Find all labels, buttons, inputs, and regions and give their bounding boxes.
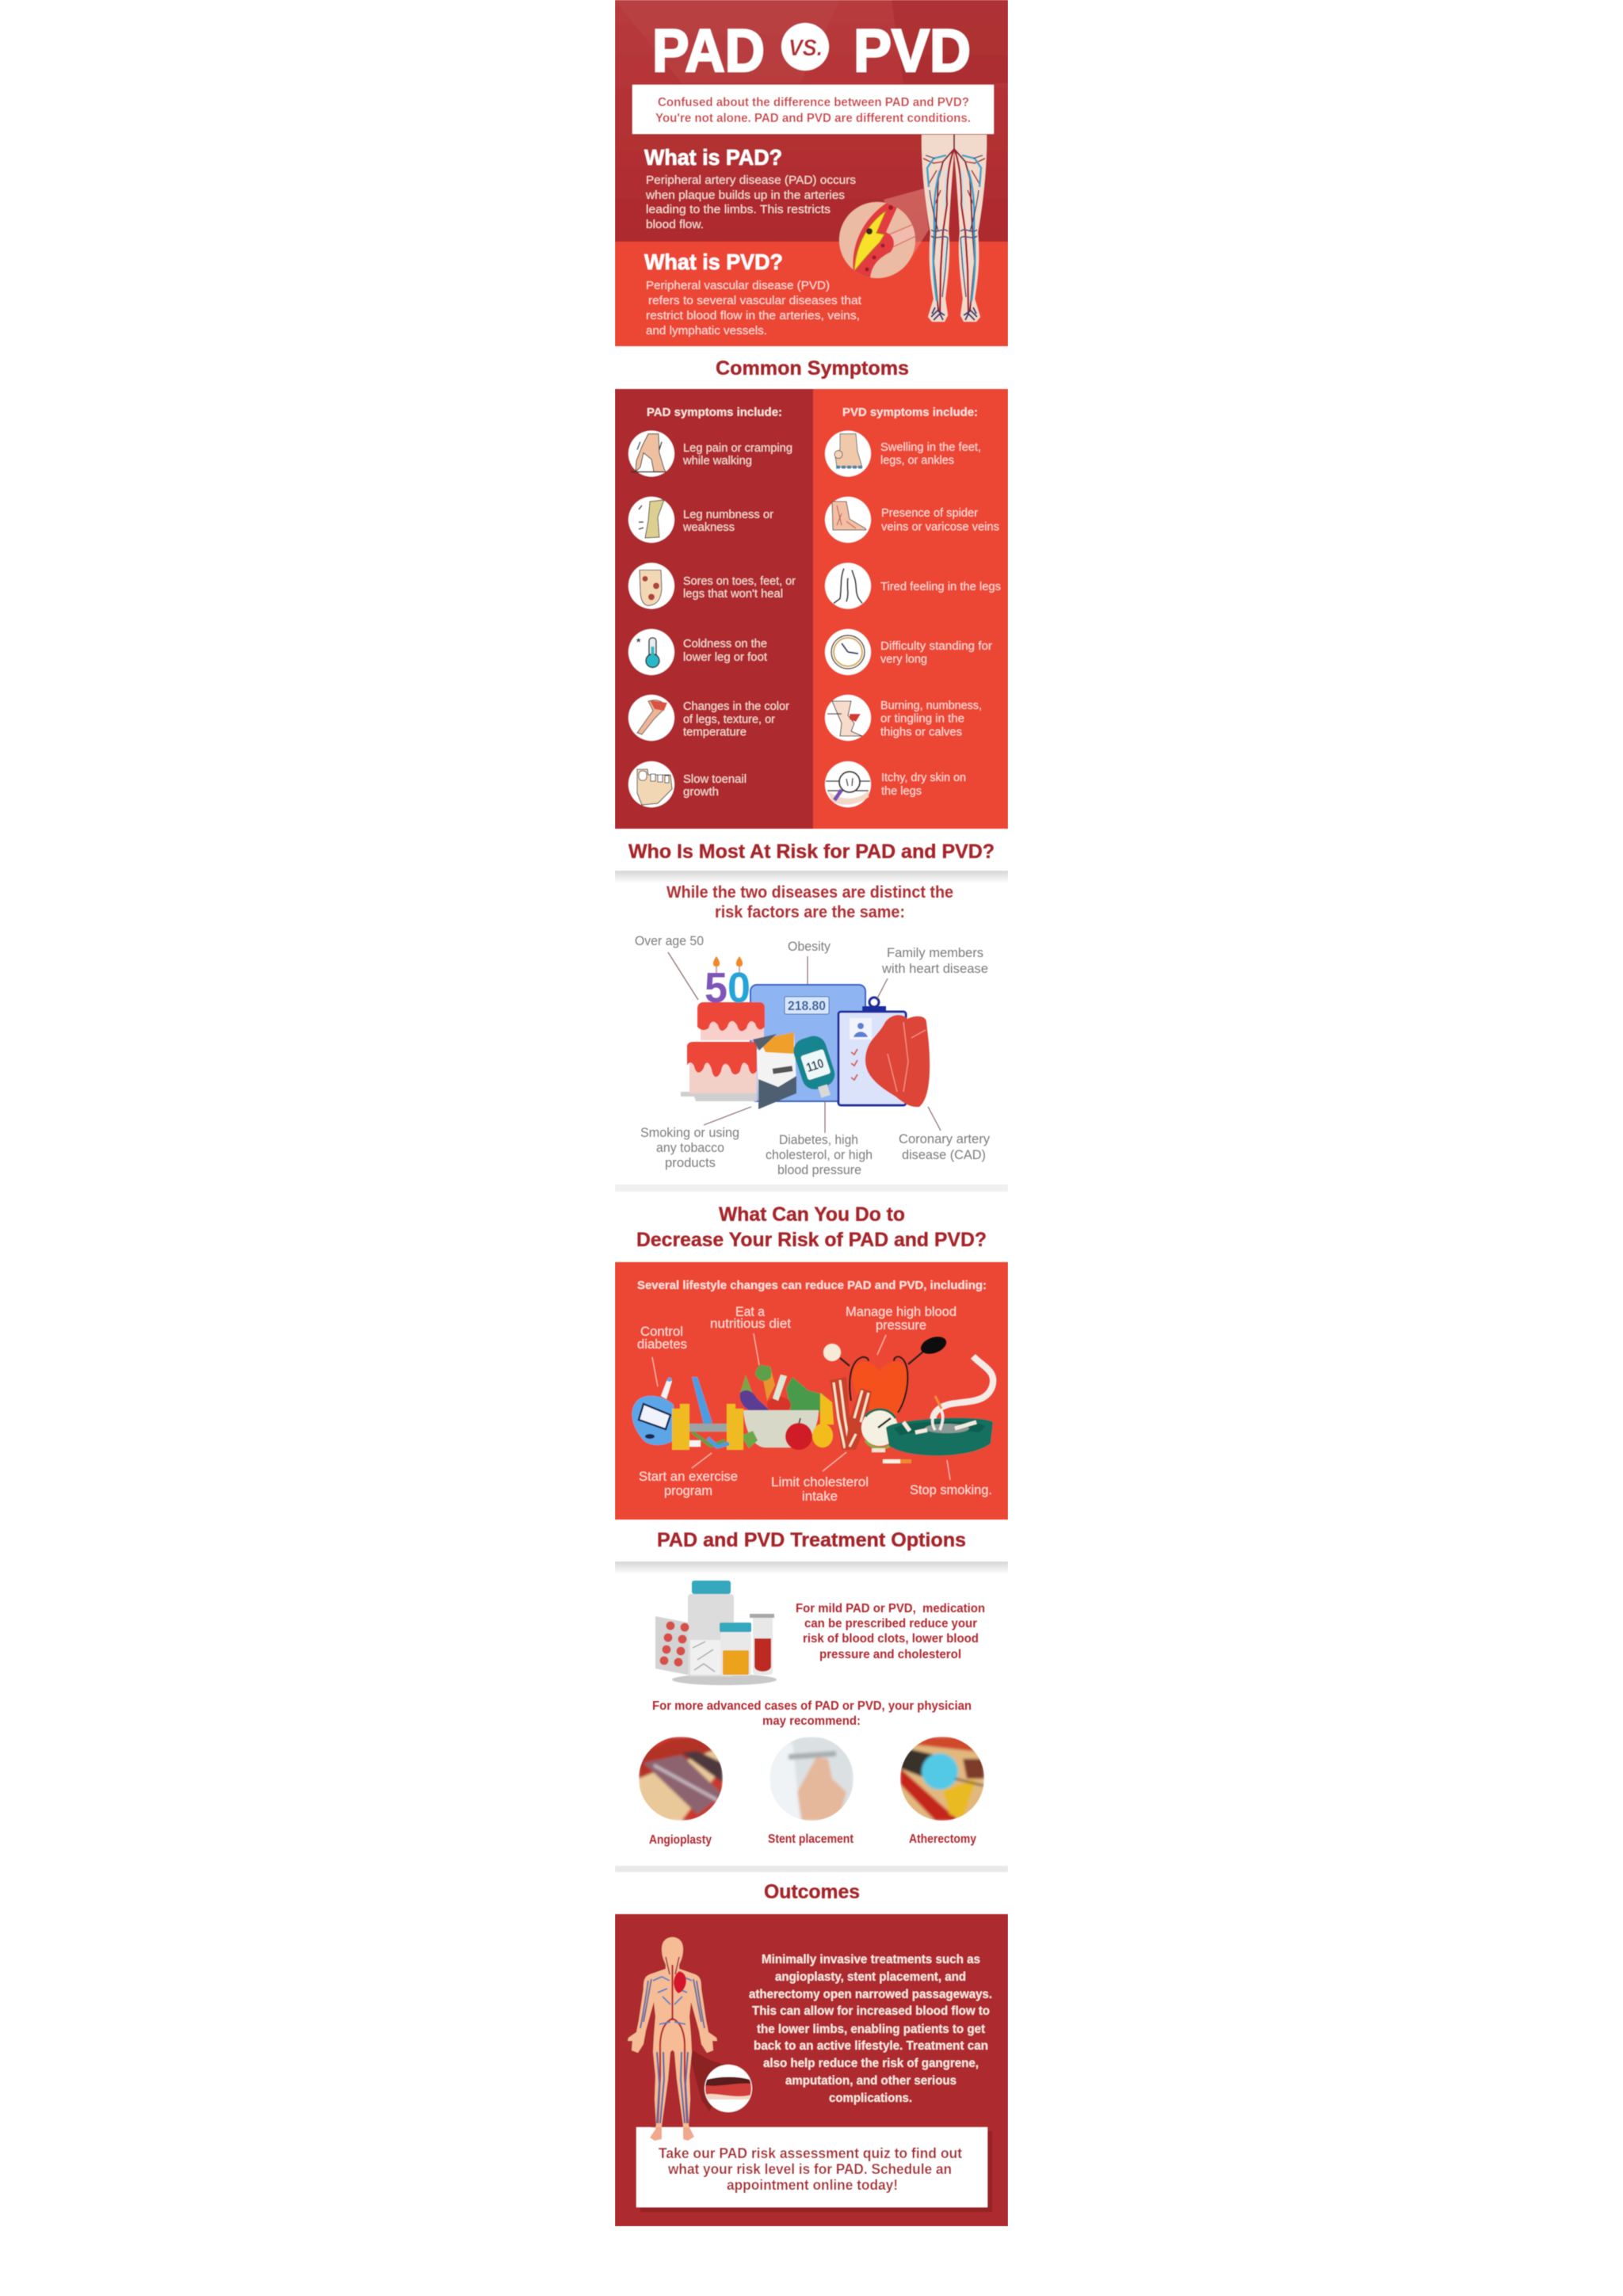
text: what is PVD: What is PVD? (644, 250, 783, 274)
label: exercise program: program (664, 1484, 712, 1498)
label: family members: Family members (887, 946, 983, 960)
icon: vs badge: VS. (789, 36, 823, 61)
label: obesity: Obesity (788, 940, 831, 954)
label: coronary artery disease: disease (CAD) (902, 1148, 986, 1162)
symptom: coldness: * (636, 635, 641, 648)
text: what is PAD: when plaque builds up in the arteries (645, 189, 845, 202)
label: coronary artery disease: Coronary artery (899, 1132, 991, 1146)
heading: who is most at risk: Who Is Most At Risk for PAD and PVD? (628, 841, 995, 863)
heading: PAD symptoms: PAD symptoms include: (647, 406, 782, 419)
callout: risk assessment (636, 2127, 992, 2212)
illustration: clipboard (838, 997, 906, 1105)
label: obesity (788, 940, 831, 984)
infographic (615, 0, 1008, 2226)
label: family members (877, 946, 988, 998)
text: mild cases (796, 1602, 985, 1661)
illustration: glucometer (632, 1377, 674, 1445)
symptom: sores (628, 563, 796, 608)
label: nutritious diet: nutritious diet (710, 1317, 791, 1331)
callout: intro box (632, 85, 994, 134)
symptom: swelling: Swelling in the feet, (880, 441, 981, 454)
symptom: colour changes: temperature (683, 726, 747, 738)
label: nutritious diet: Eat a (735, 1305, 766, 1319)
symptom: sores: legs that won't heal (683, 587, 783, 601)
illustration: medication (655, 1581, 777, 1685)
label: diabetes: blood pressure (777, 1163, 861, 1177)
illustration: smoke (934, 1356, 993, 1426)
label: smoking: any tobacco (656, 1141, 724, 1155)
symptom: swelling (825, 431, 981, 477)
subheading: risk factors: While the two diseases are distinct the (666, 883, 953, 902)
label: stop smoking: Stop smoking. (910, 1483, 992, 1497)
panel: symptoms (615, 389, 1008, 829)
heading: decrease your risk: Decrease Your Risk of PAD and PVD? (636, 1229, 987, 1251)
label: smoking: products (665, 1156, 716, 1170)
symptom: leg pain: while walking (682, 454, 752, 467)
treatment: atherectomy: Atherectomy (909, 1833, 976, 1846)
label: manage blood pressure: Manage high blood (846, 1305, 957, 1319)
illustration: magnified artery (705, 2065, 752, 2112)
subheading: risk factors (666, 883, 953, 921)
symptom: colour changes (628, 695, 789, 741)
illustration: heart with blood pressure cuff (823, 1333, 949, 1416)
label: diabetes: cholesterol, or high (766, 1148, 873, 1162)
label: coronary artery disease (899, 1107, 991, 1162)
text: outcomes paragraph: amputation, and other serious (785, 2074, 957, 2088)
section: risk factors (635, 883, 991, 1177)
symptom: clock: Difficulty standing for (880, 639, 992, 653)
symptom: leg numbness: Leg numbness or (683, 508, 773, 521)
symptom: tired legs (825, 563, 1001, 608)
heading: common symptoms: Common Symptoms (716, 357, 909, 379)
text: outcomes paragraph (749, 1953, 992, 2105)
illustration: dumbbell and pen (672, 1377, 743, 1450)
symptom: itchy skin: the legs (881, 784, 922, 798)
panel: lifestyle changes (615, 1262, 1008, 1520)
title (652, 17, 971, 85)
text: mild cases: can be prescribed reduce your (804, 1617, 977, 1630)
callout: intro box: You're not alone. PAD and PVD are different conditions. (655, 112, 971, 125)
treatment: stent placement (768, 1737, 854, 1846)
label: manage blood pressure: pressure (876, 1318, 926, 1333)
text: mild cases: For mild PAD or PVD, medication (796, 1602, 985, 1615)
symptom: spider veins: Presence of spider (881, 506, 978, 520)
title: PAD (652, 17, 765, 85)
panel: hero (615, 0, 1008, 346)
text: advanced cases: may recommend: (762, 1714, 861, 1728)
label: over age 50: Over age 50 (635, 934, 704, 948)
text: outcomes paragraph: atherectomy open narrowed passageways. (749, 1988, 992, 2001)
treatment: angioplasty (639, 1737, 723, 1847)
icon: vs badge (781, 23, 829, 71)
label: exercise program (639, 1453, 738, 1498)
text: outcomes paragraph: angioplasty, stent placement, and (775, 1970, 966, 1984)
symptom: itchy skin (825, 761, 966, 807)
text: what is PAD: Peripheral artery disease (PAD) occurs (646, 174, 856, 187)
callout: risk assessment: appointment online today! (727, 2176, 898, 2193)
illustration: scale (750, 985, 865, 1101)
symptom: coldness (628, 629, 768, 675)
illustration: human body with vessels (628, 1937, 733, 2141)
heading: decrease your risk (636, 1203, 987, 1251)
section: treatment (639, 1581, 985, 1847)
symptom: coldness: Coldness on the (683, 637, 767, 650)
treatment: angioplasty: Angioplasty (649, 1833, 712, 1847)
symptom: leg numbness (628, 497, 773, 543)
symptom: slow toenail growth (628, 761, 747, 807)
heading: decrease your risk: What Can You Do to (719, 1203, 905, 1226)
text: what is PAD: blood flow. (646, 218, 704, 231)
callout: intro box: Confused about the difference between PAD and PVD? (658, 96, 969, 109)
symptom: leg pain: Leg pain or cramping (683, 441, 792, 455)
callout: risk assessment: Take our PAD risk assessment quiz to find out (659, 2145, 962, 2161)
illustration: bacon (830, 1377, 872, 1450)
symptom: spider veins (825, 497, 999, 543)
heading: outcomes: Outcomes (764, 1881, 860, 1903)
label: exercise program: Start an exercise (639, 1470, 738, 1484)
symptom: burning: Burning, numbness, (880, 699, 982, 712)
symptom: clock (825, 629, 992, 675)
illustration: diet bowl (740, 1365, 834, 1450)
text: what is PVD (644, 250, 862, 338)
text: what is PAD: What is PAD? (644, 145, 782, 170)
illustration: glucose meter: 110 (805, 1057, 826, 1075)
label: limit cholesterol: Limit cholesterol (771, 1475, 869, 1489)
illustration: glucose meter (790, 1032, 841, 1102)
heading: treatment options: PAD and PVD Treatment Options (657, 1529, 966, 1551)
label: stop smoking (910, 1460, 992, 1497)
text: what is PVD: and lymphatic vessels. (646, 324, 767, 338)
label: over age 50 (635, 934, 704, 1000)
symptom: colour changes: Changes in the color (683, 700, 789, 713)
label: smoking: Smoking or using (640, 1126, 739, 1140)
label: control diabetes: Control (640, 1325, 683, 1339)
title: PVD (854, 17, 971, 85)
label: diabetes: Diabetes, high (779, 1133, 858, 1147)
label: family members: with heart disease (881, 962, 988, 976)
illustration: birthday cake (681, 956, 765, 1101)
symptom: burning (825, 695, 982, 741)
treatment: stent placement: Stent placement (768, 1833, 854, 1846)
label: smoking (640, 1107, 751, 1170)
text: outcomes paragraph: the lower limbs, enabling patients to get (757, 2023, 985, 2036)
text: what is PVD: refers to several vascular diseases that (648, 294, 862, 307)
symptom: sores: Sores on toes, feet, or (683, 574, 796, 588)
illustration: scale: 218.80 (788, 998, 826, 1013)
text: what is PVD: Peripheral vascular disease (PVD) (646, 279, 830, 292)
text: outcomes paragraph: Minimally invasive treatments such as (762, 1953, 980, 1966)
text: outcomes paragraph: complications. (829, 2092, 912, 2105)
text: mild cases: risk of blood clots, lower blood (803, 1632, 979, 1646)
panel: outcomes (615, 1914, 1008, 2226)
symptom: itchy skin: Itchy, dry skin on (881, 771, 966, 784)
text: what is PVD: restrict blood flow in the arteries, veins, (646, 309, 860, 322)
subheading: risk factors: risk factors are the same: (715, 903, 905, 921)
symptom: spider veins: veins or varicose veins (881, 520, 999, 534)
illustration: ashtray (883, 1396, 993, 1463)
text: advanced cases (652, 1699, 972, 1728)
label: manage blood pressure (846, 1305, 957, 1355)
symptom: burning: thighs or calves (880, 726, 962, 738)
treatment: atherectomy (900, 1737, 984, 1846)
text: lifestyle intro: Several lifestyle changes can reduce PAD and PVD, including: (637, 1279, 987, 1292)
text: outcomes paragraph: also help reduce the risk of gangrene, (763, 2057, 979, 2070)
symptom: swelling: legs, or ankles (880, 453, 954, 467)
symptom: clock: very long (880, 653, 927, 666)
illustration: cigarette pack (753, 1032, 796, 1109)
illustration: pressure gauge (861, 1409, 898, 1452)
symptom: burning: or tingling in the (880, 711, 964, 726)
label: limit cholesterol (771, 1452, 869, 1504)
label: nutritious diet (710, 1305, 791, 1365)
label: diabetes (766, 1101, 873, 1177)
symptom: leg pain (628, 431, 792, 477)
symptom: tired legs: Tired feeling in the legs (880, 580, 1001, 593)
text: what is PAD: leading to the limbs. This restricts (646, 203, 831, 216)
label: control diabetes (637, 1325, 687, 1386)
illustration: magnified blocked artery (839, 189, 929, 282)
label: control diabetes: diabetes (637, 1337, 687, 1352)
callout: risk assessment: what your risk level is for PAD. Schedule an (667, 2161, 952, 2177)
text: advanced cases: For more advanced cases of PAD or PVD, your physician (652, 1699, 972, 1713)
symptom: leg numbness: weakness (682, 521, 735, 534)
text: outcomes paragraph: This can allow for increased blood flow to (752, 2004, 990, 2018)
text: outcomes paragraph: back to an active lifestyle. Treatment can (754, 2039, 988, 2053)
text: mild cases: pressure and cholesterol (819, 1648, 961, 1661)
symptom: colour changes: of legs, texture, or (683, 713, 775, 726)
symptom: slow toenail growth: growth (683, 785, 719, 799)
label: limit cholesterol: intake (802, 1489, 838, 1504)
number candles: 50 (705, 964, 750, 1012)
symptom: coldness: lower leg or foot (683, 650, 768, 664)
symptom: slow toenail growth: Slow toenail (683, 772, 747, 786)
illustration: heart (865, 1015, 930, 1107)
text: what is PAD (644, 145, 856, 231)
heading: PVD symptoms: PVD symptoms include: (842, 406, 978, 419)
illustration: legs with blood vessels (922, 135, 987, 322)
